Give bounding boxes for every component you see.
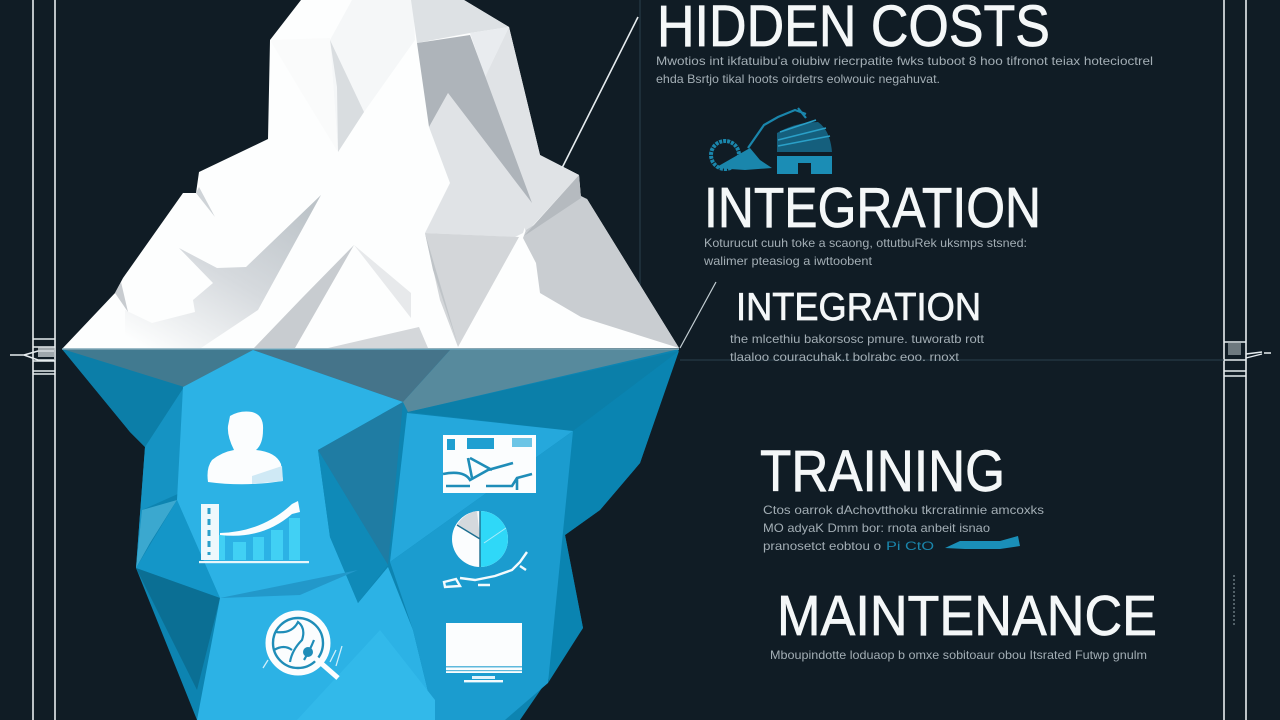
iceberg above water xyxy=(62,0,679,349)
text block: training description: Pi CtO xyxy=(886,539,934,553)
icon: monitor xyxy=(446,623,522,682)
text block: integration small description: the mlcethiu bakorsosc pmure. tuworatb rott xyxy=(730,332,985,346)
text block: training description: pranosetct eobtou o xyxy=(763,539,881,553)
scribble accent xyxy=(945,536,1020,549)
heading: integration small: INTEGRATION xyxy=(736,286,981,329)
iceberg below water xyxy=(62,349,679,720)
text block: training description: Ctos oarrok dAchovtthoku tkrcratinnie amcoxks xyxy=(763,503,1044,517)
text block: hidden costs description: ehda Bsrtjo tikal hoots oirdetrs eolwouic negahuvat. xyxy=(656,72,940,86)
iceberg tip silhouette xyxy=(62,0,679,349)
text block: integration description: Koturucut cuuh toke a scaong, ottutbuRek uksmps stsned: xyxy=(704,236,1027,250)
text block: hidden costs description xyxy=(656,54,1153,86)
submerged silhouette xyxy=(62,349,679,720)
icon: globe with wrench xyxy=(263,614,342,678)
text block: integration small description xyxy=(730,332,985,364)
icon: growth chart xyxy=(199,501,309,563)
section: hidden costs xyxy=(656,0,1153,86)
heading: maintenance: MAINTENANCE xyxy=(777,584,1157,648)
waterline xyxy=(62,348,679,350)
icon: person xyxy=(208,412,283,484)
callout line: waterline xyxy=(680,282,716,348)
section: integration secondary xyxy=(730,286,985,364)
text block: maintenance description: Mboupindotte loduaop b omxe sobitoaur obou Itsrated Futwp gnulm xyxy=(770,648,1147,662)
text block: hidden costs description: Mwotios int ikfatuibu'a oiubiw riecrpatite fwks tuboot 8 hoo tifronot teiax hotecioctrel xyxy=(656,54,1153,68)
right frame rail xyxy=(1224,0,1271,720)
callout line: top xyxy=(562,17,638,168)
left frame rail xyxy=(10,0,55,720)
heading: integration: INTEGRATION xyxy=(704,176,1041,240)
text block: integration description xyxy=(703,236,1027,268)
icon: pie chart xyxy=(452,511,508,567)
heading: training: TRAINING xyxy=(760,439,1005,504)
text block: training description xyxy=(763,503,1044,553)
iceberg facets xyxy=(115,0,679,348)
divider lines xyxy=(640,0,1224,360)
section: maintenance xyxy=(770,584,1157,662)
text block: integration small description: tlaaloo couracuhak.t bolrabc eoo. rnoxt xyxy=(730,350,960,364)
icon: flow diagram xyxy=(443,435,536,493)
text block: training description: MO adyaK Dmm bor: rnota anbeit isnao xyxy=(763,521,990,535)
icon: island map scribble xyxy=(444,552,527,587)
section: integration primary xyxy=(703,176,1041,268)
submerged facets xyxy=(62,349,679,720)
section: training xyxy=(760,439,1044,553)
text block: integration description: walimer pteasiog a iwttoobent xyxy=(703,254,873,268)
icon: teal machine xyxy=(711,108,832,174)
